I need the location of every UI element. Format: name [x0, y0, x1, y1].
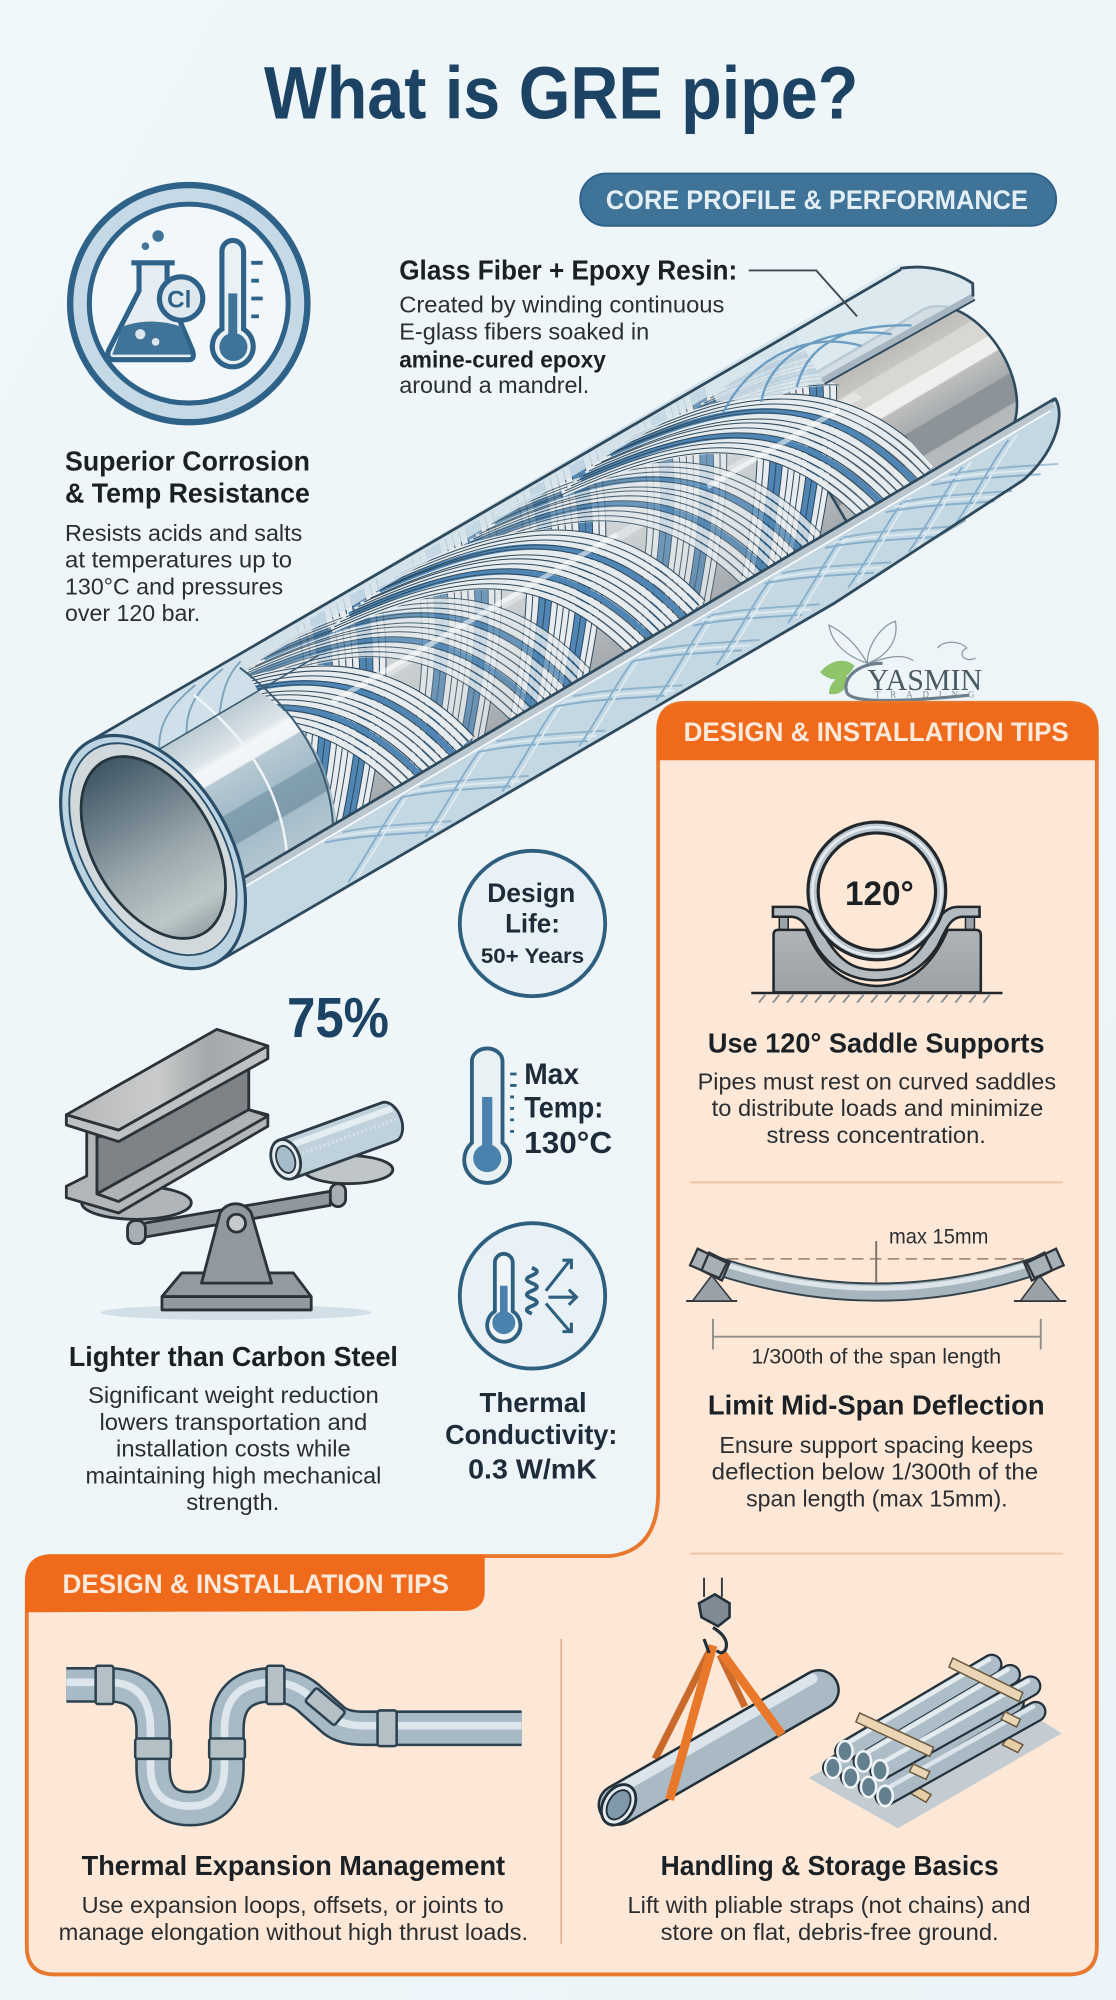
- text block: handling and storage: Lift with pliable straps (not chains) and: [628, 1892, 1031, 1918]
- text block: mid-span deflection: span length (max 15mm).: [746, 1485, 1008, 1511]
- upper sleeve flap: [704, 237, 980, 439]
- front straps: [670, 1645, 782, 1800]
- illustration: mid-span deflection: 1/300th of the span length: [751, 1345, 1001, 1368]
- text block: corrosion resistance: Superior Corrosion: [65, 446, 310, 477]
- stat: 75 percent: 75%: [287, 986, 389, 1049]
- text block: corrosion resistance: at temperatures up to: [65, 547, 292, 573]
- text block: lighter than carbon steel: Lighter than Carbon Steel: [69, 1341, 398, 1372]
- callout leader line: [749, 270, 857, 316]
- text block: handling and storage: [628, 1850, 1031, 1945]
- back straps: [655, 1647, 745, 1759]
- illustration: weight scale: [66, 1029, 393, 1320]
- illustration: mid-span deflection: max 15mm: [889, 1226, 988, 1249]
- upper sleeve strip: [231, 328, 800, 672]
- text block: handling and storage: Handling & Storage Basics: [661, 1850, 999, 1881]
- text block: lighter than carbon steel: lowers transportation and: [99, 1409, 367, 1435]
- stat: design life: 50+ Years: [481, 945, 584, 968]
- pipe: [619, 1690, 819, 1805]
- panel header: right: DESIGN & INSTALLATION TIPS: [684, 717, 1069, 747]
- heading: glass fiber callout: amine-cured epoxy: [399, 346, 606, 372]
- stat: max temperature: Max: [524, 1058, 580, 1091]
- text block: corrosion resistance: Resists acids and salts: [65, 520, 302, 546]
- text block: handling and storage: store on flat, debris-free ground.: [661, 1919, 999, 1945]
- text block: mid-span deflection: Ensure support spacing keeps: [719, 1432, 1033, 1458]
- logo: Yasmin Trading: TRADING: [875, 690, 975, 700]
- logo: Yasmin Trading: YASMIN: [867, 663, 982, 697]
- badge: core profile and performance: CORE PROFILE & PERFORMANCE: [606, 185, 1028, 215]
- scale beam: [136, 1191, 330, 1239]
- lower sleeve flap: [187, 398, 1088, 965]
- panel header: bottom: [26, 1555, 485, 1612]
- stat: max temperature: Temp:: [524, 1091, 603, 1124]
- illustration: mid-span deflection: [686, 1226, 1066, 1368]
- text block: saddle supports: stress concentration.: [767, 1122, 986, 1148]
- text block: thermal expansion: manage elongation without high thrust loads.: [59, 1919, 528, 1945]
- text block: thermal conductivity: Conductivity:: [445, 1419, 617, 1450]
- heading: glass fiber callout: E-glass fibers soaked in: [399, 318, 649, 344]
- scale base: [162, 1273, 311, 1310]
- pipe end rings: [22, 703, 284, 1001]
- heading: glass fiber callout: Glass Fiber + Epoxy Resin:: [399, 254, 737, 285]
- stat: design life: [460, 851, 605, 996]
- heading: glass fiber callout: [399, 254, 737, 398]
- text block: thermal conductivity: [445, 1387, 617, 1484]
- text block: saddle supports: Pipes must rest on curved saddles: [698, 1068, 1056, 1094]
- text block: lighter than carbon steel: Significant weight reduction: [88, 1382, 379, 1408]
- illustration: 120 degree saddle: 120°: [845, 875, 914, 913]
- badge: core profile and performance: [580, 174, 1056, 226]
- text block: lighter than carbon steel: installation costs while: [116, 1436, 351, 1462]
- icon: thermal conductivity: [460, 1223, 605, 1369]
- upper sleeve edge: [88, 265, 901, 747]
- hook: [699, 1594, 730, 1626]
- illustration: 120 degree saddle: [751, 822, 1002, 1003]
- illustration: GRE pipe on scale: [266, 1098, 408, 1183]
- text block: corrosion resistance: over 120 bar.: [65, 600, 200, 626]
- back wood blocks: [911, 1737, 1023, 1802]
- mandrel: [774, 286, 1040, 530]
- text block: lighter than carbon steel: [69, 1341, 398, 1515]
- text block: thermal expansion: Thermal Expansion Management: [82, 1850, 505, 1881]
- near sleeve section: [88, 619, 397, 911]
- text block: saddle supports: [698, 1027, 1056, 1148]
- icon: corrosion and temperature: Cl: [167, 286, 191, 313]
- text block: mid-span deflection: deflection below 1/300th of the: [712, 1459, 1038, 1485]
- text block: corrosion resistance: 130°C and pressures: [65, 573, 283, 599]
- logo: Yasmin Trading: [820, 621, 982, 701]
- stat: max temperature: 130°C: [524, 1126, 612, 1160]
- text block: mid-span deflection: [708, 1390, 1045, 1511]
- text block: corrosion resistance: [65, 446, 310, 626]
- panel header: bottom: DESIGN & INSTALLATION TIPS: [62, 1569, 449, 1599]
- stack of pipes: [833, 1659, 1036, 1796]
- pipe collars: [96, 1666, 397, 1759]
- text block: thermal expansion: Use expansion loops, offsets, or joints to: [82, 1892, 504, 1918]
- text block: lighter than carbon steel: maintaining high mechanical: [85, 1462, 381, 1488]
- steel I-beam: [66, 1069, 268, 1213]
- icon: thermometer: [464, 1048, 517, 1183]
- text block: lighter than carbon steel: strength.: [186, 1489, 279, 1515]
- panel header: right: [657, 703, 1098, 760]
- text block: saddle supports: Use 120° Saddle Supports: [708, 1027, 1045, 1058]
- illustration: crane lifting pipe: [594, 1578, 819, 1831]
- text block: corrosion resistance: & Temp Resistance: [65, 478, 310, 509]
- stat: design life: Design: [487, 878, 575, 908]
- icon: flask: [108, 230, 203, 360]
- title: What is GRE pipe?: [264, 52, 858, 135]
- stat: design life: Life:: [505, 908, 560, 938]
- stat: max temperature: [464, 1048, 612, 1183]
- text block: mid-span deflection: Limit Mid-Span Deflection: [708, 1390, 1045, 1421]
- icon: corrosion and temperature: [70, 185, 307, 422]
- illustration: GRE pipe cutaway: [59, 265, 1061, 970]
- illustration: stored pipe bundle: [809, 1658, 1062, 1828]
- text block: thermal conductivity: Thermal: [480, 1387, 587, 1418]
- illustration: expansion loop: [66, 1666, 522, 1809]
- wood planks: [856, 1658, 1023, 1779]
- icon: thermometer: [212, 240, 263, 367]
- text block: saddle supports: to distribute loads and minimize: [712, 1095, 1043, 1121]
- heading: glass fiber callout: around a mandrel.: [399, 372, 589, 398]
- text block: thermal conductivity: 0.3 W/mK: [468, 1453, 597, 1484]
- heading: glass fiber callout: Created by winding continuous: [399, 292, 724, 318]
- panel: design and installation tips: [26, 703, 1098, 1974]
- text block: thermal expansion: [59, 1850, 528, 1945]
- glass fiber windings: [87, 238, 1059, 922]
